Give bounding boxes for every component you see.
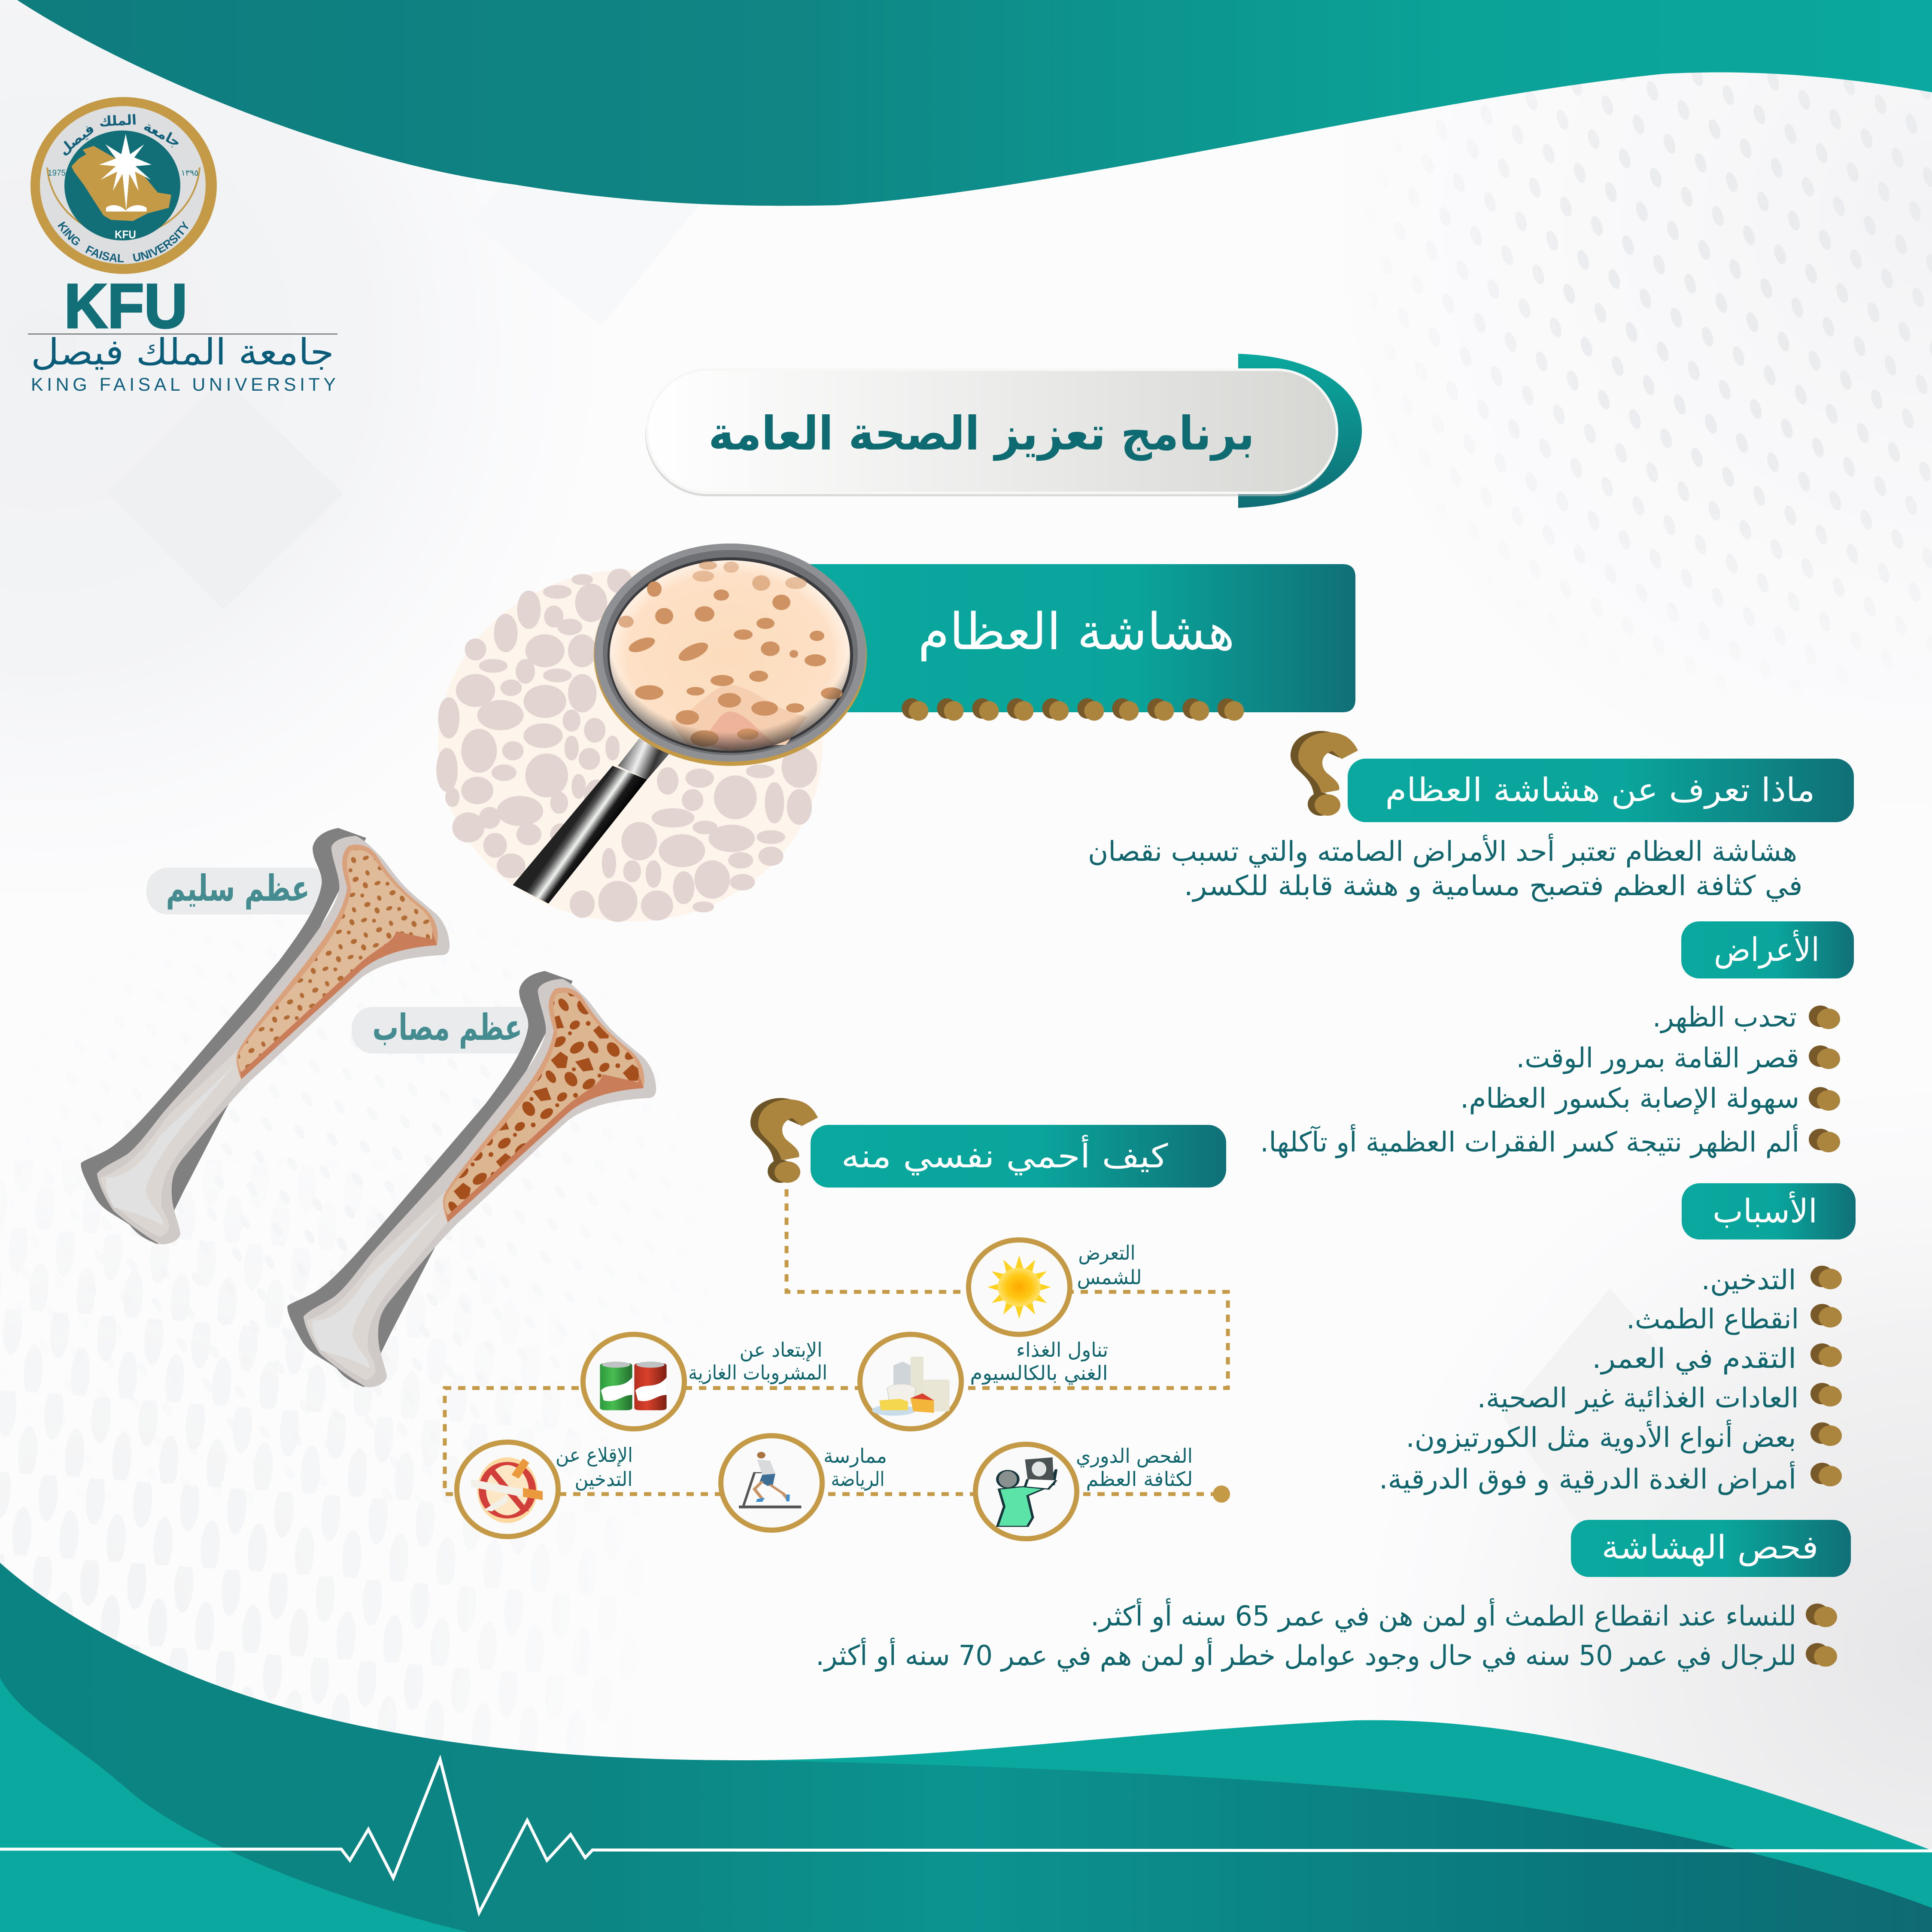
university name arabic: جامعة الملك فيصل	[31, 331, 334, 373]
label	[1077, 1241, 1142, 1289]
icon: soda cans	[600, 1361, 667, 1410]
heading text: كيف أحمي نفسي منه	[841, 1135, 1168, 1176]
icon: question mark 1	[1291, 731, 1358, 816]
seal: ١٣٩٥	[181, 169, 198, 178]
label text: عظم مصاب	[373, 1006, 522, 1049]
paragraph: هشاشة العظام تعتبر أحد الأمراض الصامته والتي تسبب نقصان	[1088, 833, 1797, 868]
seal: الملك	[99, 112, 137, 130]
label: ممارسة	[823, 1444, 887, 1467]
healthy bone	[81, 828, 450, 1244]
logo	[28, 97, 337, 395]
step: quit smoking	[457, 1442, 633, 1537]
list: screening: للنساء عند انقطاع الطمث أو لمن هن في عمر 65 سنه أو أكثر.	[1091, 1598, 1796, 1632]
handle	[513, 738, 669, 904]
heartbeat line	[0, 1759, 1932, 1913]
affected bone	[287, 971, 656, 1387]
heading: how to protect	[811, 1125, 1226, 1188]
banner text: هشاشة العظام	[918, 602, 1235, 661]
label: الإقلاع عن	[556, 1443, 633, 1467]
dashed connector path	[445, 1189, 1230, 1503]
step: soft drinks	[583, 1334, 827, 1429]
step: bone density scan	[975, 1444, 1193, 1539]
icon: question mark 2	[750, 1098, 818, 1183]
list: causes: انقطاع الطمث.	[1626, 1303, 1799, 1335]
seal: KFU	[115, 228, 136, 241]
label: تناول الغذاء	[1016, 1338, 1108, 1362]
seal: 1975	[48, 169, 66, 178]
icon: treadmill runner	[739, 1452, 801, 1508]
paragraph	[1088, 833, 1802, 902]
list: causes: بعض أنواع الأدوية مثل الكورتيزون.	[1406, 1419, 1796, 1454]
paragraph: في كثافة العظم فتصبح مسامية و هشة قابلة للكسر.	[1184, 870, 1802, 902]
list: screening: للرجال في عمر 50 سنه في حال وجود عوامل خطر أو لمن هم في عمر 70 سنه أو أكثر.	[816, 1637, 1796, 1672]
list: screening	[816, 1598, 1837, 1672]
seal	[30, 97, 217, 274]
heading text: الأعراض	[1714, 930, 1820, 969]
pill: affected bone label	[352, 1006, 541, 1054]
label: المشروبات الغازية	[688, 1361, 827, 1385]
step: calcium food	[860, 1334, 1108, 1429]
icon: doctor with x-ray	[997, 1457, 1056, 1526]
list: causes	[1379, 1264, 1842, 1495]
label: الفحص الدوري	[1076, 1444, 1193, 1468]
heading: causes	[1682, 1183, 1856, 1239]
heading text: ماذا تعرف عن هشاشة العظام	[1385, 771, 1815, 809]
top wave	[17, 0, 1932, 206]
icon: dairy products	[872, 1357, 950, 1416]
label	[823, 1444, 887, 1491]
label: التعرض	[1078, 1241, 1135, 1265]
heading text: فحص الهشاشة	[1601, 1528, 1819, 1567]
label	[556, 1443, 633, 1491]
heading: screening	[1571, 1520, 1851, 1577]
heading: symptoms	[1681, 921, 1854, 978]
university name english: KING FAISAL UNIVERSITY	[31, 374, 336, 395]
label: الإبتعاد عن	[739, 1338, 823, 1362]
list: causes: التقدم في العمر.	[1592, 1343, 1796, 1375]
cellular bone texture circle	[438, 570, 823, 922]
label	[970, 1338, 1108, 1385]
icon: sun	[987, 1255, 1051, 1319]
seal: جامعة	[141, 118, 184, 151]
label	[1076, 1444, 1193, 1491]
heading text: الأسباب	[1713, 1191, 1817, 1230]
list: symptoms	[1260, 1002, 1840, 1158]
seal: KING FAISAL UNIVERSITY	[55, 219, 192, 265]
label: الغني بالكالسيوم	[970, 1361, 1108, 1385]
title text: برنامج تعزيز الصحة العامة	[708, 407, 1255, 461]
list: causes: العادات الغذائية غير الصحية.	[1477, 1382, 1799, 1414]
list: symptoms: تحدب الظهر.	[1653, 1002, 1797, 1033]
banner: osteoporosis	[810, 564, 1355, 712]
label: للشمس	[1077, 1266, 1142, 1289]
pill: healthy bone label	[146, 867, 331, 914]
label: التدخين	[574, 1467, 633, 1491]
seal: فيصل	[55, 120, 97, 158]
list: symptoms: سهولة الإصابة بكسور العظام.	[1460, 1083, 1799, 1115]
heading: what do you know	[1348, 759, 1854, 822]
icon: no smoking	[471, 1457, 543, 1523]
label: لكثافة العظم	[1086, 1467, 1193, 1491]
list: causes: أمراض الغدة الدرقية و فوق الدرقية.	[1379, 1461, 1796, 1495]
list: symptoms: ألم الظهر نتيجة كسر الفقرات العظمية أو تآكلها.	[1260, 1124, 1799, 1158]
title banner	[645, 354, 1362, 508]
step: sun	[969, 1240, 1142, 1334]
label: الرياضة	[831, 1467, 884, 1491]
KFU wordmark: KFU	[64, 271, 187, 341]
bottom wave	[0, 1563, 1932, 1932]
list: symptoms: قصر القامة بمرور الوقت.	[1516, 1042, 1799, 1074]
icon: magnifying glass	[513, 544, 867, 904]
label text: عظم سليم	[166, 867, 310, 910]
banner dots	[902, 698, 1244, 721]
step: exercise	[721, 1436, 887, 1530]
list: causes: التدخين.	[1701, 1264, 1796, 1296]
label	[688, 1338, 827, 1385]
